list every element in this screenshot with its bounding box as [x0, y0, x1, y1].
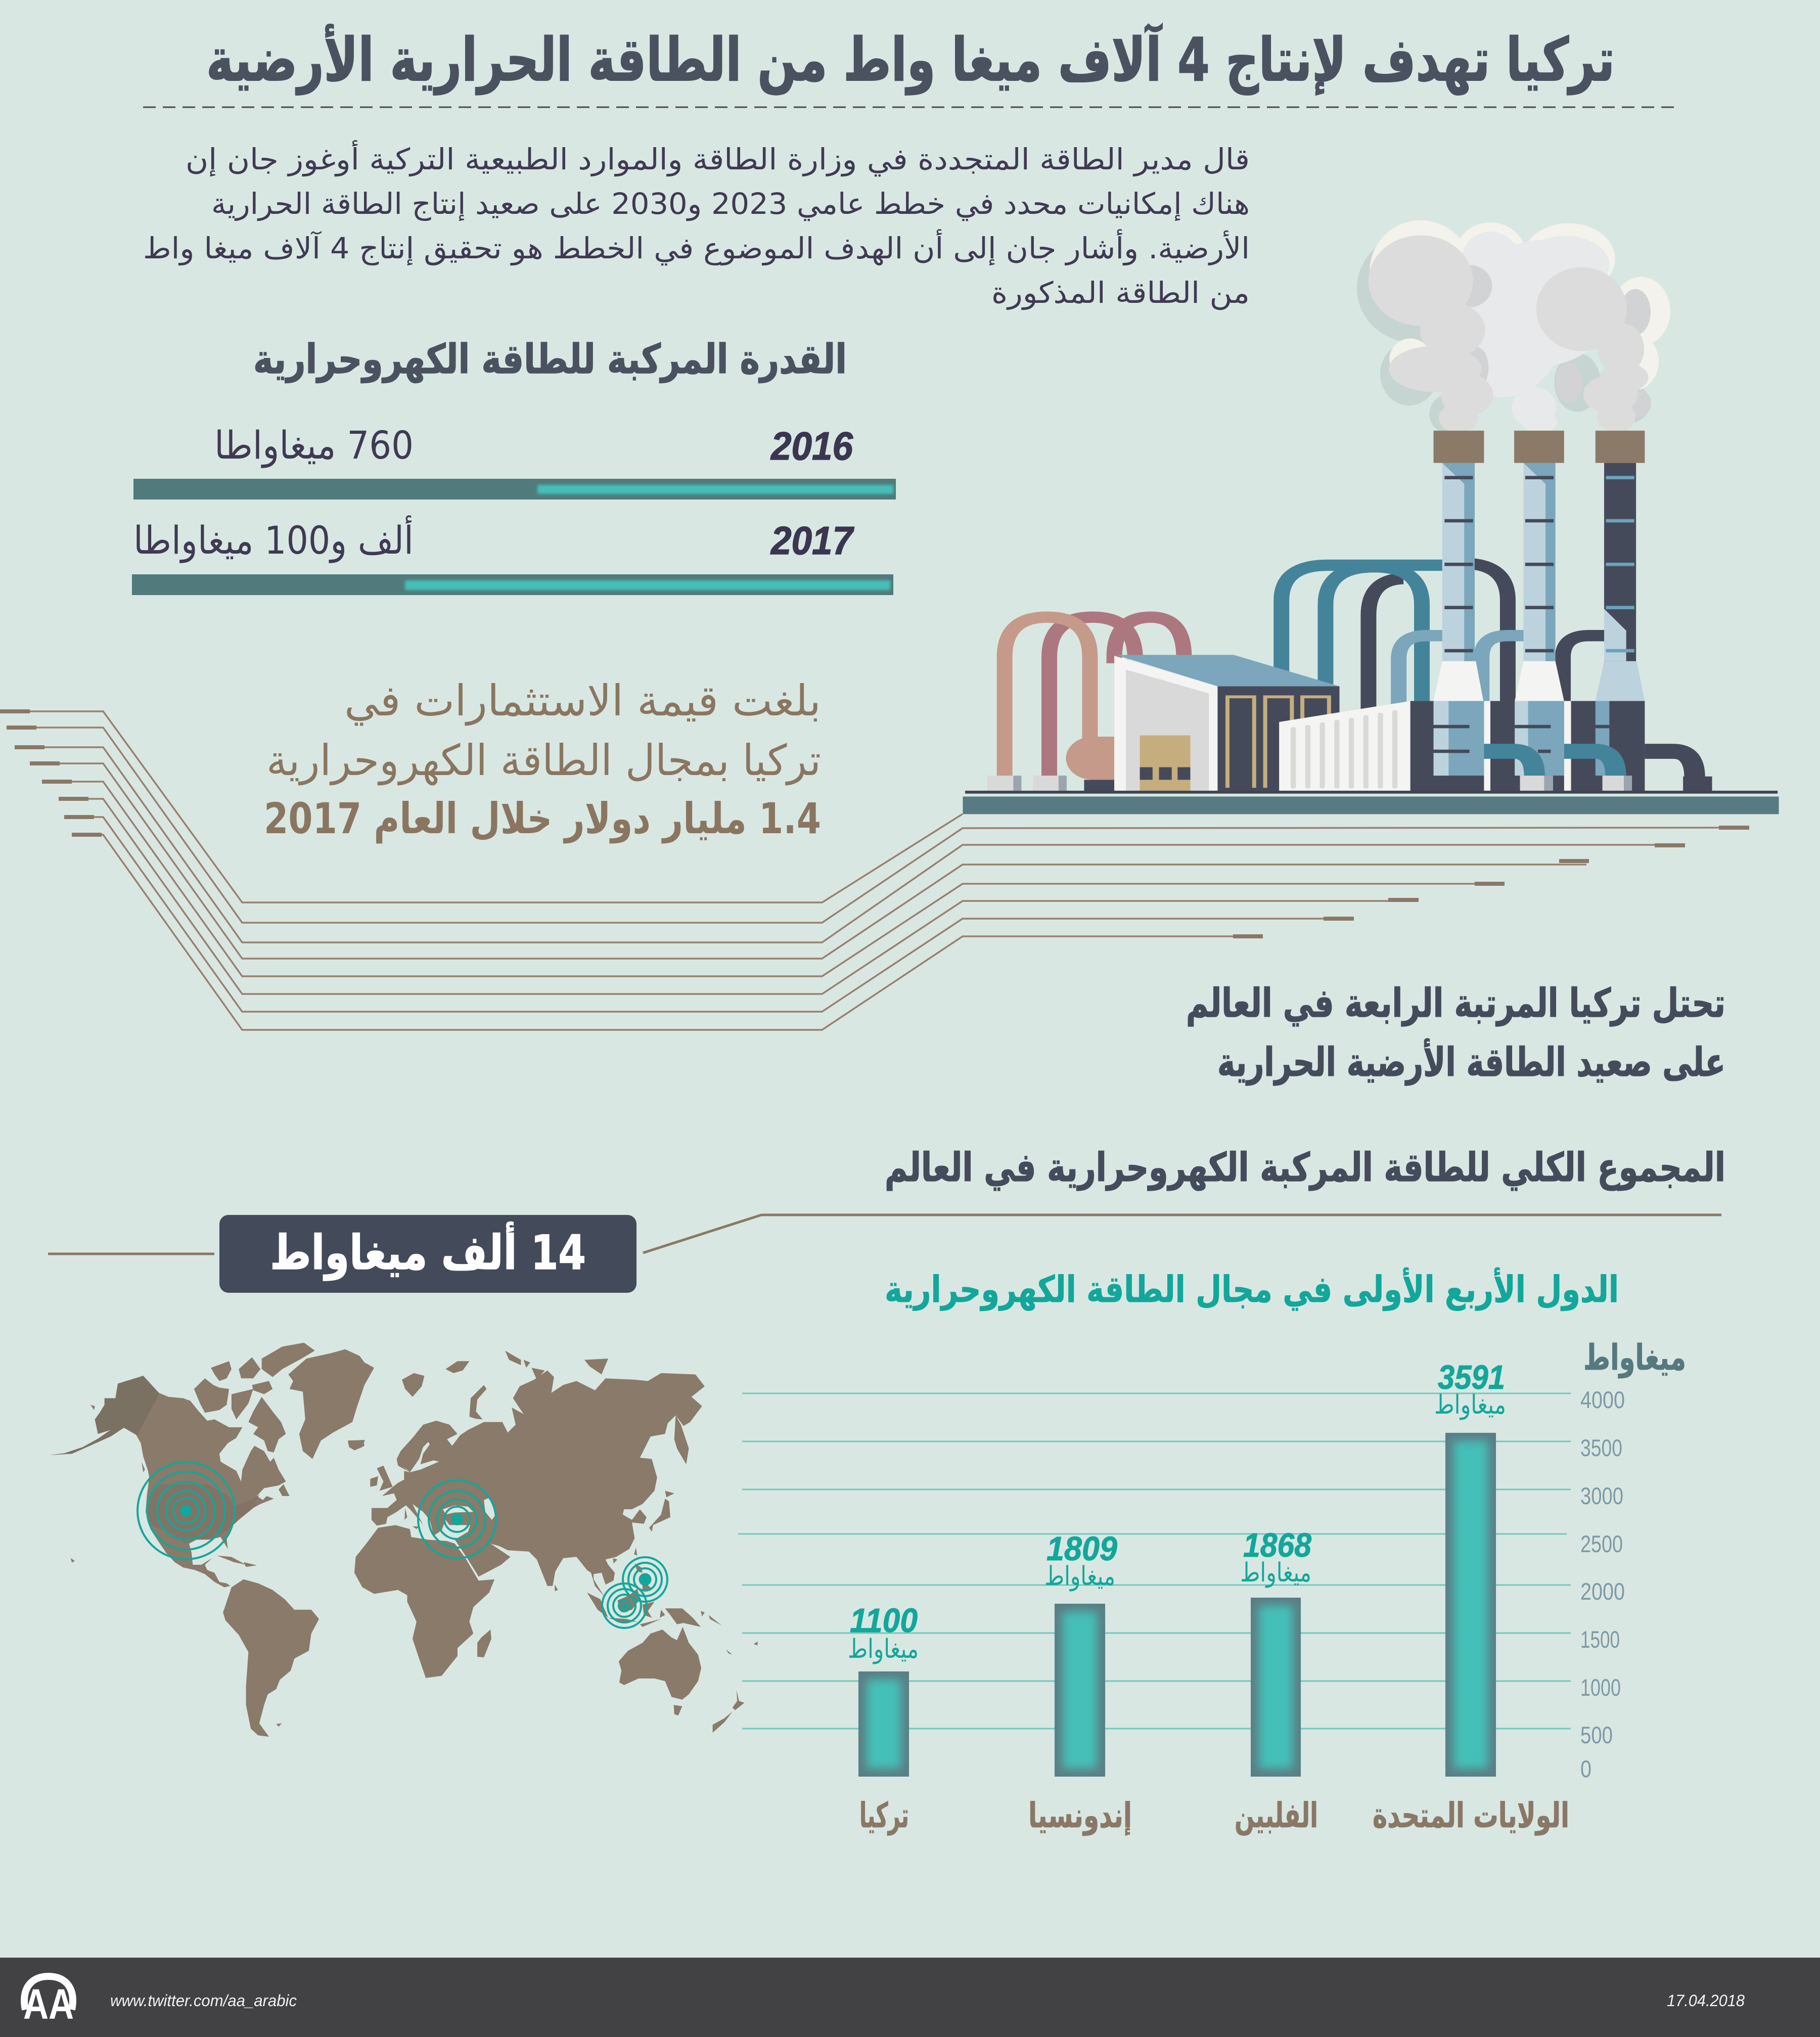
bar: indonesia: إندونسيا: [1028, 1796, 1132, 1836]
capacity row 2016: 2016: [770, 424, 853, 468]
bar: philippines: [1235, 1526, 1318, 1836]
bar: united states: ميغاواط: [1434, 1390, 1506, 1420]
chimney base block: [1410, 701, 1712, 791]
callout: 14 thousand megawatts: 14 ألف ميغاواط: [270, 1222, 586, 1281]
bar: united states: 3591: [1438, 1359, 1505, 1396]
bar: united states: [1373, 1359, 1569, 1836]
footer bar: [0, 1958, 1820, 2037]
platform: [963, 791, 1779, 814]
intro paragraph: [143, 140, 1250, 310]
capacity row 2017: ألف و100 ميغاواطا: [133, 515, 414, 563]
white warehouse: [1279, 701, 1410, 791]
y axis labels: 2500: [1580, 1530, 1623, 1557]
map target rings: usa: [138, 1462, 235, 1559]
map target rings: turkey: [418, 1480, 496, 1558]
intro paragraph: قال مدير الطاقة المتجددة في وزارة الطاقة والموارد الطبيعية التركية أوغوز جان إن: [186, 140, 1250, 177]
footer link: www.twitter.com/aa_arabic: [110, 1991, 297, 2010]
y axis labels: [1580, 1386, 1625, 1782]
back pipes: [1005, 564, 1607, 779]
factory illustration: [963, 220, 1779, 814]
y axis labels: 1000: [1580, 1674, 1621, 1701]
y axis labels: 2000: [1580, 1578, 1625, 1605]
bar chart: [738, 1337, 1686, 1836]
callout: 14 thousand megawatts: [48, 1215, 1721, 1293]
bar: turkey: [848, 1602, 919, 1836]
bar: turkey: تركيا: [859, 1796, 909, 1836]
intro paragraph: هناك إمكانيات محدد في خطط عامي 2023 و2030 على صعيد إنتاج الطاقة الحرارية: [211, 187, 1250, 221]
y axis labels: 1500: [1580, 1626, 1620, 1653]
capacity row 2016: 760 ميغاواطا: [214, 423, 414, 468]
map target rings: indonesia: [602, 1583, 647, 1628]
intro paragraph: الأرضية. وأشار جان إلى أن الهدف الموضوع في الخطط هو تحقيق إنتاج 4 آلاف ميغا واط: [143, 229, 1250, 266]
chart title: الدول الأربع الأولى في مجال الطاقة الكهروحرارية: [885, 1267, 1619, 1311]
y axis labels: 4000: [1580, 1386, 1625, 1413]
investment text: تركيا بمجال الطاقة الكهروحرارية: [266, 736, 821, 786]
chimneys: [1433, 431, 1645, 701]
americas and greenland: [50, 1343, 374, 1737]
y axis unit: ميغاواط: [1583, 1337, 1686, 1378]
ranking heading: [1186, 981, 1725, 1085]
title: تركيا تهدف لإنتاج 4 آلاف ميغا واط من الطاقة الحرارية الأرضية: [206, 23, 1615, 95]
map target rings: philippines: [623, 1557, 667, 1602]
heading: installed capacity: القدرة المركبة للطاقة الكهروحرارية: [253, 336, 847, 383]
bar: indonesia: [1028, 1530, 1132, 1836]
y axis labels: 3000: [1580, 1482, 1623, 1509]
bar: turkey: 1100: [850, 1602, 918, 1640]
small valves: [987, 776, 1067, 791]
footer date: 17.04.2018: [1667, 1991, 1745, 2010]
bar: philippines: ميغاواط: [1240, 1558, 1311, 1588]
investment text: 1.4 مليار دولار خلال العام 2017: [264, 794, 821, 844]
smoke clouds: [1357, 220, 1670, 433]
bar: philippines: الفلبين: [1235, 1796, 1318, 1836]
pink tank: [1066, 737, 1114, 780]
investment text: بلغت قيمة الاستثمارات في: [344, 676, 821, 726]
capacity row 2017: 2017: [770, 518, 854, 563]
investment text: [264, 676, 821, 844]
main building: [1114, 655, 1340, 791]
y axis labels: 3500: [1580, 1434, 1622, 1461]
world map: [50, 1343, 757, 1737]
logo: AA: AA: [23, 1980, 74, 2028]
capacity row 2017: [132, 515, 893, 595]
y axis labels: 500: [1580, 1722, 1613, 1748]
bar: indonesia: 1809: [1046, 1530, 1117, 1568]
europe, asia, africa, oceania: [348, 1350, 757, 1733]
y axis labels: 0: [1580, 1755, 1591, 1782]
bar: philippines: 1868: [1243, 1526, 1312, 1564]
bar: indonesia: ميغاواط: [1044, 1561, 1115, 1592]
bar: turkey: ميغاواط: [848, 1634, 919, 1664]
connector lines: [0, 709, 1749, 1030]
capacity row 2016: [133, 423, 896, 500]
bar: united states: الولايات المتحدة: [1373, 1796, 1569, 1836]
intro paragraph: من الطاقة المذكورة: [991, 276, 1250, 310]
